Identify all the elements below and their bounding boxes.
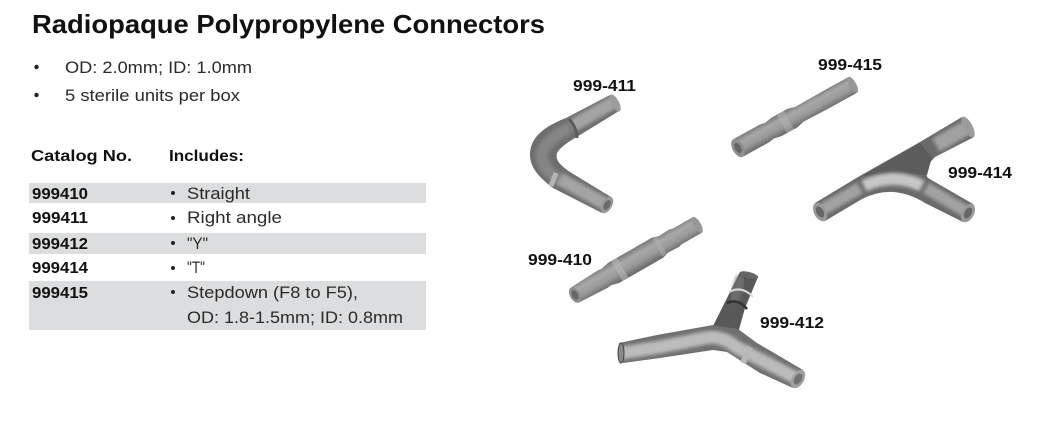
label 999-414: 999-414 <box>948 165 1012 182</box>
specification bullet list: 5 sterile units per box <box>65 86 241 105</box>
row 999411 <box>32 208 282 227</box>
row 999410: 999410 <box>32 186 88 203</box>
table header: includes: Includes: <box>169 148 244 165</box>
label 999-415: 999-415 <box>818 57 882 74</box>
label 999-412: 999-412 <box>760 315 824 332</box>
row 999415: 999415 <box>32 285 88 302</box>
connector 999-414 T <box>810 115 978 225</box>
row 999415 <box>29 281 426 330</box>
row 999414: "T" <box>187 258 205 277</box>
row 999412: 999412 <box>32 236 88 253</box>
row 999412: "Y" <box>187 234 208 253</box>
row 999412 <box>29 233 426 254</box>
connector 999-412 Y <box>618 270 808 391</box>
connector 999-415 stepdown <box>728 74 861 160</box>
connector 999-410 straight <box>565 213 706 307</box>
label 999-410: 999-410 <box>528 252 592 269</box>
table header: catalog number: Catalog No. <box>31 148 132 165</box>
label 999-411: 999-411 <box>573 78 636 95</box>
row 999410 <box>29 183 426 203</box>
catalog table <box>29 148 426 330</box>
row 999411: Right angle <box>187 208 282 227</box>
specification bullet list <box>34 58 252 105</box>
row 999411: 999411 <box>32 210 88 227</box>
connector 999-411 right angle <box>530 93 623 215</box>
row 999414: 999414 <box>32 260 88 277</box>
specification bullet list: OD: 2.0mm; ID: 1.0mm <box>65 58 252 77</box>
row 999415: Stepdown (F8 to F5), <box>187 283 358 302</box>
row 999414 <box>32 258 205 277</box>
title: Radiopaque Polypropylene Connectors <box>32 9 545 39</box>
row 999415: OD: 1.8-1.5mm; ID: 0.8mm <box>187 308 403 327</box>
row 999410: Straight <box>187 184 250 203</box>
